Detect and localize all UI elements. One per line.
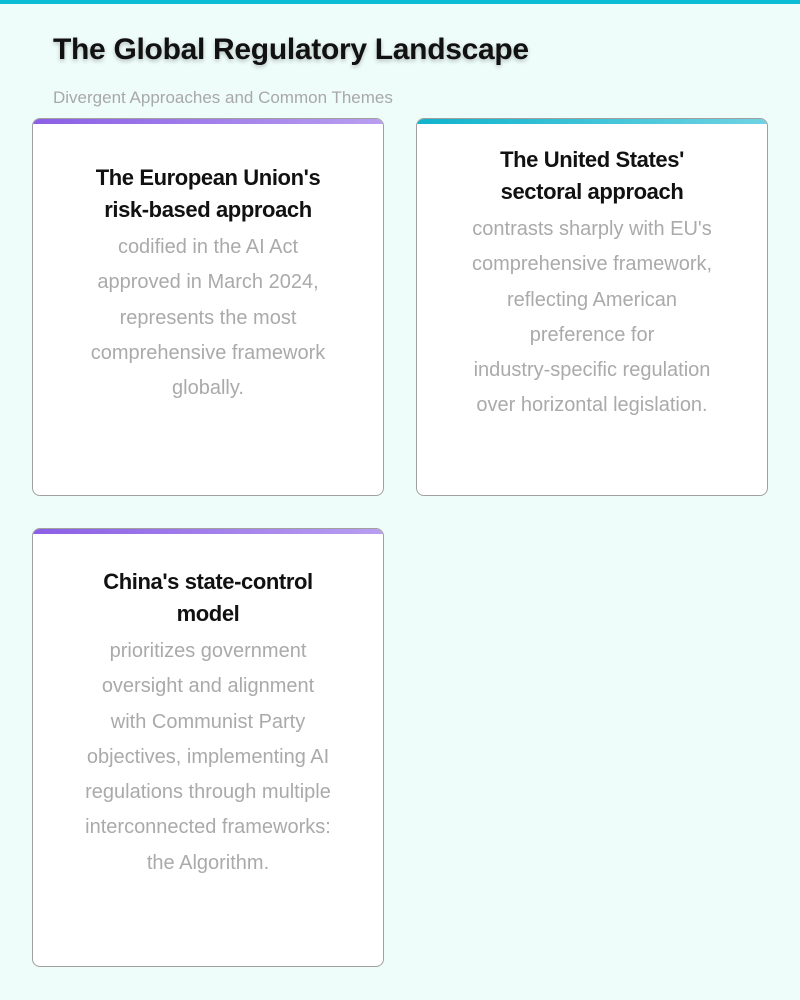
panel: China xyxy=(32,528,384,967)
text: EU: represents the most xyxy=(120,307,296,329)
text: China: prioritizes government xyxy=(110,640,306,662)
text: China: interconnected frameworks: xyxy=(85,816,331,838)
text: EU: globally. xyxy=(172,377,244,399)
text: EU: comprehensive framework xyxy=(91,342,325,364)
title: The Global Regulatory Landscape xyxy=(53,33,529,66)
heading: US xyxy=(500,147,684,204)
heading: EU: The European Union's xyxy=(96,165,320,190)
text: US: comprehensive framework, xyxy=(472,253,712,275)
text: US: reflecting American xyxy=(507,289,677,311)
text: China: objectives, implementing AI xyxy=(87,746,329,768)
text: EU: approved in March 2024, xyxy=(97,271,319,293)
panel: EU xyxy=(32,118,384,496)
text: China: oversight and alignment xyxy=(102,675,314,697)
heading: EU xyxy=(96,165,320,222)
text: US: over horizontal legislation. xyxy=(476,394,708,416)
heading: EU: risk-based approach xyxy=(104,197,312,222)
text: US: preference for xyxy=(530,324,654,346)
text: US: industry-specific regulation xyxy=(474,359,710,381)
text: EU xyxy=(91,236,326,399)
heading: US: The United States' xyxy=(500,147,684,172)
text: EU: codified in the AI Act xyxy=(118,236,298,258)
text: China: regulations through multiple xyxy=(85,781,331,803)
heading: China xyxy=(103,569,313,626)
text: China: the Algorithm. xyxy=(147,852,269,874)
text: US: contrasts sharply with EU's xyxy=(472,218,712,240)
heading: US: sectoral approach xyxy=(501,179,683,204)
text: China: with Communist Party xyxy=(111,711,305,733)
subtitle: Divergent Approaches and Common Themes xyxy=(53,88,393,107)
text: China xyxy=(85,640,331,874)
panel: US xyxy=(416,118,768,496)
heading: China: model xyxy=(177,601,239,626)
text: US xyxy=(472,218,712,416)
heading: China: China's state-control xyxy=(103,569,313,594)
